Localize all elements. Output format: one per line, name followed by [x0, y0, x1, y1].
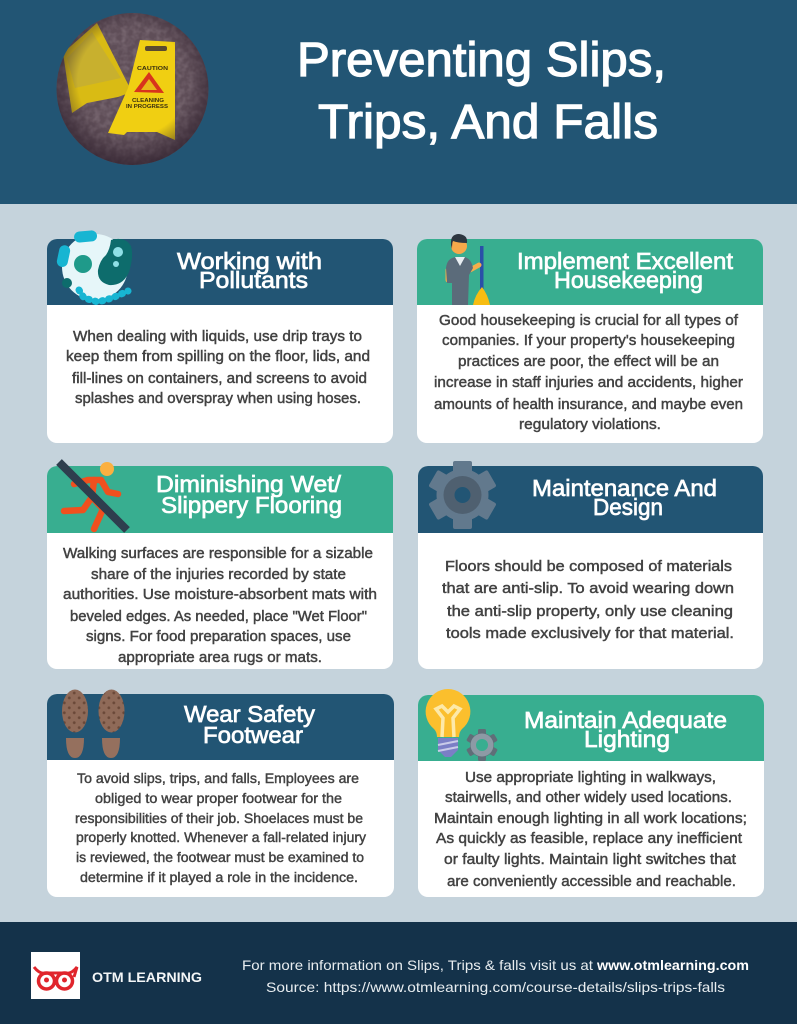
heading	[517, 248, 734, 293]
body text: increase in staff injuries and accidents, higher	[434, 375, 743, 391]
body text: amounts of health insurance, and maybe even	[434, 397, 743, 413]
body text: Good housekeeping is crucial for all types of	[439, 313, 739, 329]
body text: Walking surfaces are responsible for a sizable	[63, 546, 373, 562]
body text: When dealing with liquids, use drip trays to	[73, 329, 362, 345]
title: Trips, And Falls	[318, 96, 658, 149]
body text: fill-lines on containers, and screens to avoid	[72, 371, 367, 387]
body text: stairwells, and other widely used locations.	[445, 790, 732, 806]
body text: tools made exclusively for that material.	[446, 626, 734, 642]
panel: implement excellent housekeeping	[417, 234, 763, 443]
body text: the anti-slip property, only use cleaning	[447, 604, 733, 620]
heading: Wear Safety	[184, 701, 316, 727]
body text	[75, 771, 366, 885]
body text: Maintain enough lighting in all work locations;	[434, 811, 747, 827]
body text	[66, 329, 370, 407]
footer information text: For more information on Slips, Trips & falls visit us at	[242, 957, 593, 973]
heading: Lighting	[584, 726, 670, 752]
body text: splashes and overspray when using hoses.	[75, 391, 361, 407]
body text: As quickly as feasible, replace any inefficient	[436, 831, 742, 847]
photo: wet floor caution signs: IN PROGRESS	[126, 104, 169, 110]
body text: share of the injuries recorded by state	[91, 567, 346, 583]
icon: light bulb and gear	[426, 689, 498, 761]
heading: Design	[593, 494, 663, 520]
body text: determine if it played a role in the incidence.	[80, 870, 358, 885]
heading: Footwear	[203, 722, 303, 748]
body text: that are anti-slip. To avoid wearing down	[442, 581, 734, 597]
heading	[156, 471, 342, 518]
photo: wet floor caution signs	[56, 13, 209, 165]
heading: Housekeeping	[554, 267, 703, 293]
body text: are conveniently accessible and reachable.	[447, 874, 736, 890]
body text: or faulty lights. Maintain light switches that	[444, 852, 736, 868]
heading: Pollutants	[199, 267, 308, 293]
body text: keep them from spilling on the floor, lids, and	[66, 349, 370, 365]
title	[297, 34, 666, 149]
logo: owl mark	[31, 952, 80, 999]
panel: wear safety footwear	[47, 690, 394, 897]
body text: properly knotted. Whenever a fall-related injury	[76, 830, 366, 845]
heading: Implement Excellent	[517, 248, 734, 274]
body text: To avoid slips, trips, and falls, Employees are	[77, 771, 359, 786]
heading	[524, 707, 727, 752]
body text: Floors should be composed of materials	[445, 559, 732, 575]
icon: gear	[428, 461, 497, 529]
photo: wet floor caution signs: CAUTION	[137, 66, 168, 72]
body text	[434, 770, 747, 890]
body text	[442, 559, 734, 642]
body text: signs. For food preparation spaces, use	[86, 629, 351, 645]
footer information text: www.otmlearning.com	[596, 957, 749, 973]
body text: regulatory violations.	[519, 417, 661, 433]
brand name: OTM LEARNING	[92, 969, 202, 985]
body text: appropriate area rugs or mats.	[118, 650, 322, 666]
header band	[0, 0, 797, 204]
heading	[184, 701, 316, 748]
heading	[177, 248, 322, 293]
body text: companies. If your property's housekeeping	[442, 333, 735, 349]
footer information text: Source: https://www.otmlearning.com/course-details/slips-trips-falls	[266, 979, 725, 995]
icon: crossed out running figure	[59, 462, 127, 530]
footer band	[0, 922, 797, 1024]
heading: Working with	[177, 248, 322, 274]
panel: maintain adequate lighting	[418, 689, 764, 897]
heading	[532, 475, 717, 520]
title: Preventing Slips,	[297, 34, 666, 87]
footer information text	[242, 957, 749, 995]
heading: Maintain Adequate	[524, 707, 727, 733]
body text: obliged to wear proper footwear for the	[95, 791, 342, 806]
icon: shoe prints	[62, 690, 124, 758]
panel: maintenance and design	[418, 461, 763, 669]
body text: Use appropriate lighting in walkways,	[465, 770, 716, 786]
panel: diminishing wet slippery flooring	[47, 462, 393, 669]
icon: janitor with broom	[446, 234, 490, 305]
photo: wet floor caution signs: CLEANING	[132, 98, 164, 104]
heading: Diminishing Wet/	[156, 471, 342, 497]
heading: Maintenance And	[532, 475, 717, 501]
body text	[63, 546, 377, 666]
heading: Slippery Flooring	[161, 492, 342, 518]
body text: is reviewed, the footwear must be examined to	[76, 850, 364, 865]
body text: authorities. Use moisture-absorbent mats with	[63, 587, 377, 603]
body text: responsibilities of their job. Shoelaces must be	[75, 811, 363, 826]
icon: pollutant cell	[56, 230, 132, 302]
body text	[434, 313, 743, 433]
body text: beveled edges. As needed, place "Wet Floor"	[70, 609, 367, 625]
body text: practices are poor, the effect will be an	[458, 354, 719, 370]
panel: working with pollutants	[47, 230, 393, 443]
